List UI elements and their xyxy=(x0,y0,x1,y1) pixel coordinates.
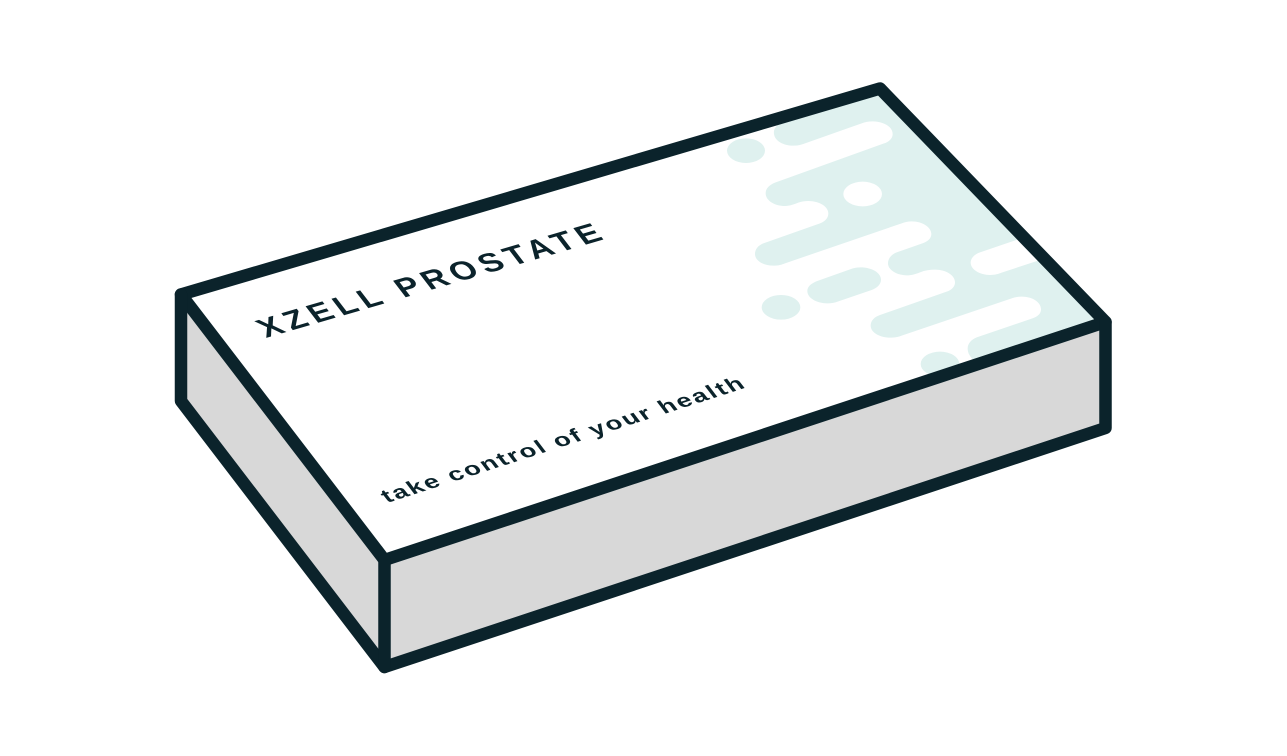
illustration: product box xyxy=(174,82,1112,674)
mint dot top left xyxy=(727,138,765,163)
box left side face xyxy=(181,294,384,667)
mint drip main shape xyxy=(755,96,1094,360)
white pill cut-out reaching the edge xyxy=(971,239,1040,275)
box outline xyxy=(181,88,1106,667)
mint drip pattern xyxy=(727,96,1094,374)
white dot cut-out xyxy=(843,182,882,206)
tagline: take control of your health xyxy=(376,373,749,507)
mint dot lower xyxy=(762,295,800,320)
brand name: XZELL PROSTATE xyxy=(250,218,609,343)
mint dot at bottom edge xyxy=(921,352,959,376)
box top face xyxy=(181,88,1106,560)
mint pill xyxy=(807,267,881,303)
box front side face xyxy=(384,322,1106,667)
